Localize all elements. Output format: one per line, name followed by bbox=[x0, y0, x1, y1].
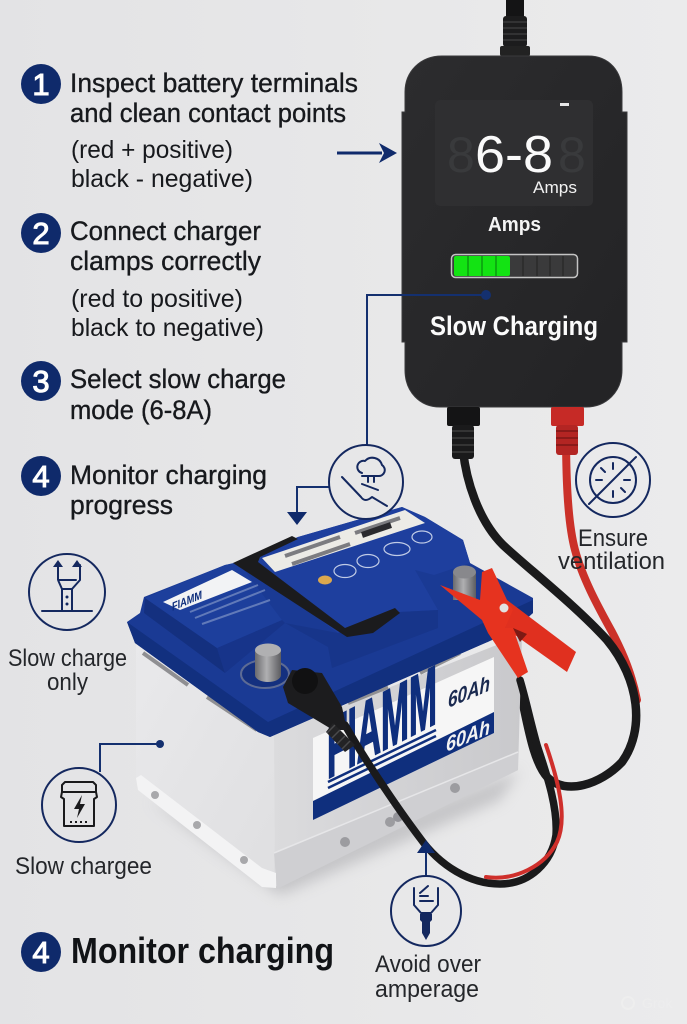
left block top bbox=[145, 562, 282, 648]
right foot bbox=[274, 752, 518, 889]
black charger cable bbox=[463, 450, 636, 787]
slow chargee label: Slow chargee bbox=[15, 853, 152, 880]
ensure ventilation label: ventilation bbox=[558, 548, 665, 575]
step 4: monitor progress bbox=[21, 456, 267, 520]
battery label: 60Ah bbox=[448, 670, 490, 713]
display screen: Amps bbox=[533, 178, 577, 197]
arrow: to charger bbox=[337, 143, 397, 163]
left sticker: FIAMM bbox=[172, 588, 202, 614]
display screen: 8 bbox=[558, 127, 586, 183]
ground shadow bbox=[150, 770, 520, 895]
watermark bbox=[622, 995, 673, 1011]
amps label: Amps bbox=[488, 214, 541, 236]
left face bbox=[136, 640, 275, 887]
top sticker bbox=[262, 510, 425, 572]
slow charge only label bbox=[8, 645, 127, 696]
charger cables to clamps bbox=[463, 430, 637, 787]
step 4: monitor progress: Monitor charging bbox=[70, 460, 267, 490]
red stripe bbox=[486, 745, 562, 878]
charge bar bbox=[452, 254, 578, 278]
step 2: connect clamps: Connect charger bbox=[70, 216, 261, 246]
step 4: monitor progress: progress bbox=[70, 490, 173, 520]
positive terminal bbox=[453, 566, 476, 600]
step 4: monitor progress: 4 bbox=[32, 459, 50, 494]
watermark: Grok bbox=[642, 995, 673, 1011]
avoid over amperage label bbox=[375, 951, 481, 1003]
ensure ventilation label bbox=[558, 525, 665, 575]
slow charging label: Slow Charging bbox=[430, 311, 598, 341]
left sticker bbox=[163, 570, 270, 624]
display screen bbox=[435, 100, 593, 206]
bottom heading: monitor charging: Monitor charging bbox=[71, 930, 334, 971]
charger unit bbox=[402, 56, 627, 459]
gold dot bbox=[318, 576, 332, 584]
icon: ensure ventilation bbox=[558, 443, 665, 575]
step 2: connect clamps: black to negative) bbox=[71, 314, 264, 342]
battery label bbox=[313, 648, 494, 820]
avoid over amperage label: Avoid over bbox=[375, 951, 481, 978]
battery label: FIAMM bbox=[327, 648, 437, 798]
main block bbox=[242, 507, 470, 633]
red charger cable bbox=[566, 430, 637, 700]
ensure ventilation label: Ensure bbox=[578, 525, 648, 552]
display screen: 8 bbox=[447, 127, 475, 183]
battery label: 60Ah bbox=[446, 714, 490, 757]
icon: slow charge only bbox=[8, 554, 127, 696]
icon: avoid over amperage bbox=[375, 840, 481, 1003]
charger body bbox=[402, 56, 627, 407]
left foot bbox=[136, 775, 276, 888]
black clamp bbox=[283, 668, 355, 752]
main block front bbox=[285, 610, 438, 668]
step 1: inspect terminals: black - negative) bbox=[71, 165, 253, 193]
black handle bbox=[233, 536, 400, 637]
lid warning icons bbox=[334, 531, 432, 578]
lid front lip bbox=[127, 600, 533, 737]
terminal pit left bbox=[241, 660, 289, 688]
step 1: inspect terminals: Inspect battery terminals bbox=[70, 68, 358, 98]
step 1: inspect terminals bbox=[21, 64, 358, 193]
step 3: select slow mode: 3 bbox=[32, 364, 50, 399]
left block front bbox=[144, 598, 225, 673]
leader line: charger to icon bbox=[367, 290, 491, 446]
vent strips bbox=[143, 640, 488, 730]
step 3: select slow mode: Select slow charge bbox=[70, 364, 286, 394]
red clamp bbox=[440, 568, 576, 678]
leader line: battery to icon bbox=[100, 740, 164, 772]
step 2: connect clamps: (red to positive) bbox=[71, 285, 243, 313]
negative terminal bbox=[255, 644, 281, 682]
display screen: 6-8 bbox=[475, 126, 553, 184]
left block notch side bbox=[217, 620, 285, 673]
icon: slow charge battery bbox=[15, 768, 152, 880]
step 1: inspect terminals: and clean contact points bbox=[70, 98, 346, 128]
black strain relief bbox=[447, 407, 480, 459]
lid lower tier bbox=[127, 507, 533, 737]
black stripe bbox=[345, 680, 556, 884]
step 3: select slow mode: mode (6-8A) bbox=[70, 395, 212, 425]
step 1: inspect terminals: 1 bbox=[32, 67, 50, 102]
slow charge only label: Slow charge bbox=[8, 645, 127, 672]
wire with red core from black clamp bbox=[345, 680, 562, 884]
bottom heading: monitor charging: 4 bbox=[32, 935, 50, 970]
avoid over amperage label: amperage bbox=[375, 976, 479, 1003]
slow charge only label: only bbox=[47, 669, 88, 696]
icon: top circle with tools bbox=[287, 445, 403, 525]
step 2: connect clamps bbox=[21, 213, 264, 342]
charger cable top bbox=[500, 0, 530, 56]
step 2: connect clamps: clamps correctly bbox=[70, 246, 261, 276]
battery bbox=[127, 507, 533, 889]
step 3: select slow mode bbox=[21, 361, 286, 425]
step 2: connect clamps: 2 bbox=[32, 216, 50, 251]
step 1: inspect terminals: (red + positive) bbox=[71, 136, 233, 164]
red strain relief bbox=[551, 407, 584, 455]
right face bbox=[274, 635, 522, 887]
